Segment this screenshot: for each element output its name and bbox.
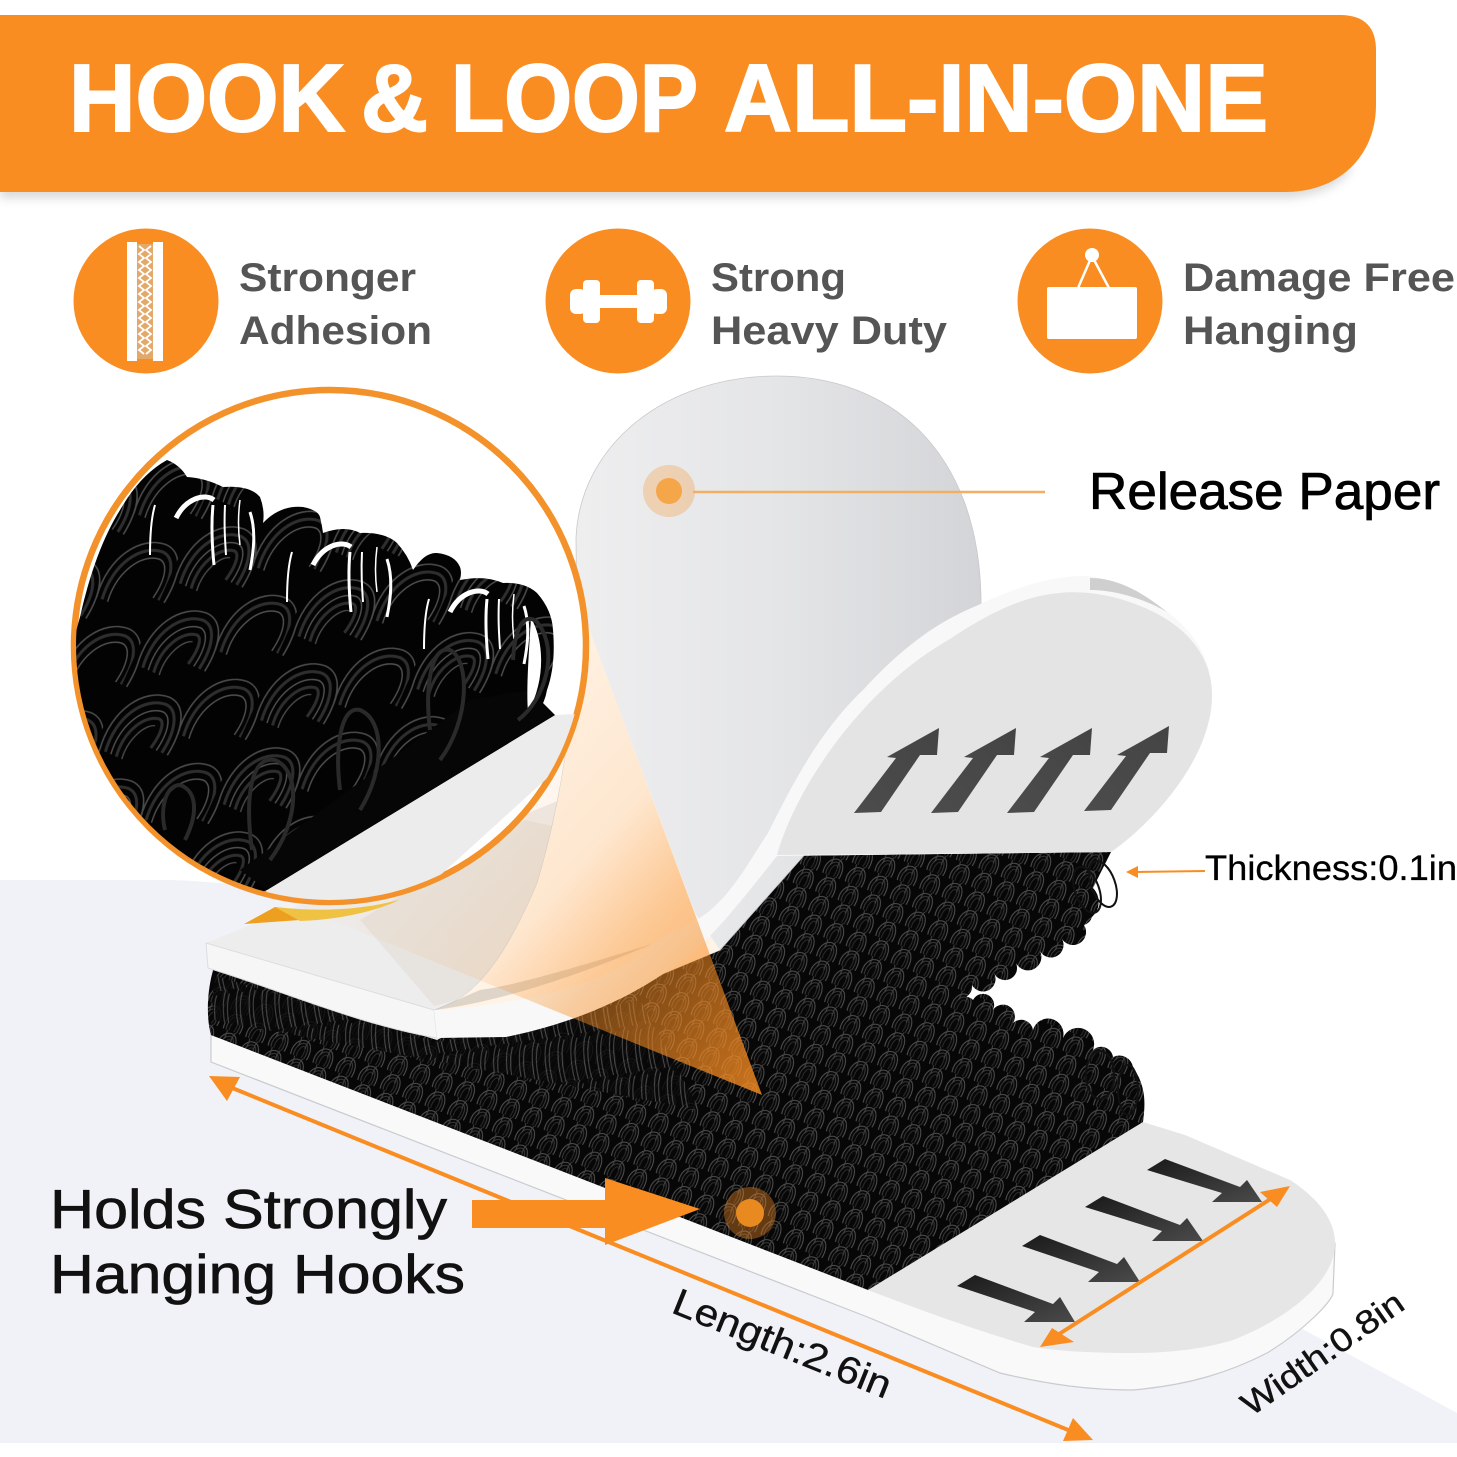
label: [1183, 256, 1455, 353]
title: [69, 45, 1268, 152]
magnifier cone: [270, 631, 762, 1095]
foam strip in close-up: [266, 714, 575, 900]
length label: Length:2.6in: [667, 1281, 897, 1407]
open loops in close-up: [163, 619, 548, 860]
icon: dumbbell: [546, 228, 690, 374]
callout: release paper dot: [643, 465, 1045, 517]
peeled tab with arrows: [434, 576, 1212, 1038]
black loops in close-up: [60, 460, 555, 920]
holds strongly label: Hanging Hooks: [50, 1243, 465, 1305]
white gaps between loops: [150, 497, 541, 712]
black hook and loop fabric: [208, 852, 1144, 1290]
label: Hanging: [1183, 309, 1358, 353]
length dimension arrow: [209, 1076, 1093, 1441]
label: Heavy Duty: [711, 309, 948, 353]
cone shadow on strip: [244, 900, 399, 924]
label: Adhesion: [239, 309, 432, 353]
title: &: [361, 45, 428, 152]
feature: stronger adhesion: [74, 228, 432, 374]
title: HOOK: [69, 45, 345, 152]
release paper label: Release Paper: [1089, 463, 1440, 521]
bottom adhesive strip: [211, 1035, 1335, 1390]
printed arrows: pull direction: [957, 1159, 1262, 1322]
feature: damage free hanging: [1018, 228, 1455, 374]
dark base of loops: [240, 690, 555, 890]
icon: adhesion layers: [74, 228, 218, 374]
label: [239, 256, 432, 353]
edge loop curl: [1068, 857, 1138, 1115]
label: [711, 256, 948, 353]
holds strongly arrow: [472, 1178, 700, 1245]
printed arrows: peel direction: [854, 726, 1169, 813]
white bottom band: [0, 1443, 1457, 1457]
holds strongly label: Holds Strongly: [50, 1178, 448, 1240]
front edge of foam strip: [206, 943, 437, 1038]
label: Strong: [711, 256, 846, 300]
loop target dot: [724, 1187, 776, 1239]
magnifier circle: loop close-up: [70, 386, 590, 906]
long front strands: [213, 975, 700, 1110]
thickness callout: Thickness:0.1in: [1205, 849, 1457, 888]
release paper: [434, 376, 981, 1010]
title: LOOP: [451, 45, 698, 152]
strip top face: [206, 800, 560, 1010]
holds strongly label: [50, 1178, 465, 1305]
width label: Width:0.8in: [1234, 1283, 1411, 1423]
icon: hanging sign: [1018, 228, 1162, 374]
paper fold shadow: [434, 944, 652, 1010]
shaded area on strip: [360, 820, 570, 1006]
paper inside magnifier cone: [434, 631, 720, 1010]
title: ALL-IN-ONE: [724, 45, 1268, 152]
label: Damage Free: [1183, 256, 1455, 300]
feature: strong heavy duty: [546, 228, 948, 374]
width dimension arrow: [1040, 1186, 1290, 1347]
floor background: [0, 880, 1457, 1443]
header banner: [0, 15, 1376, 198]
label: Stronger: [239, 256, 416, 300]
